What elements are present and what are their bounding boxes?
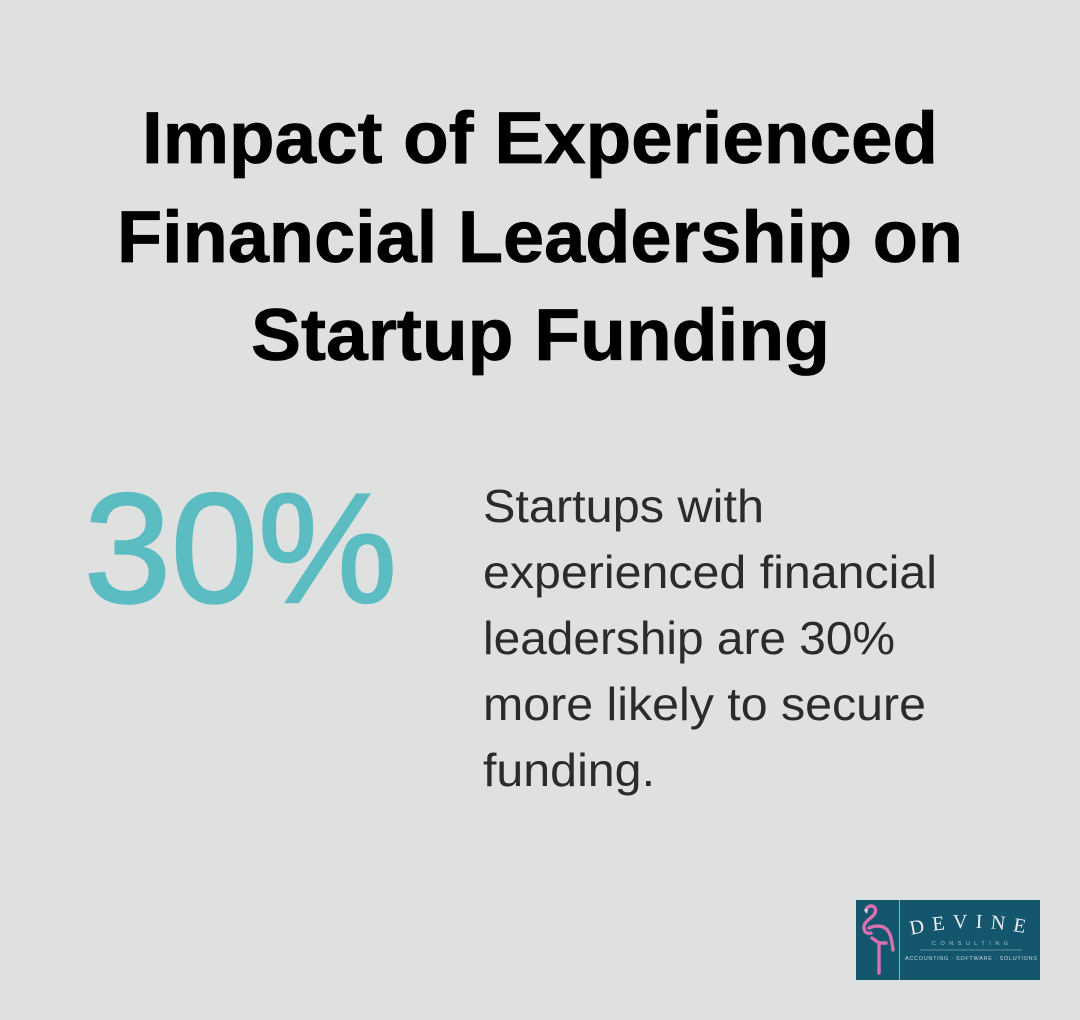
logo wordmark: DEVINE xyxy=(909,914,1026,935)
big stat: 30%: 30% xyxy=(84,462,397,636)
description text xyxy=(483,480,937,796)
title: Impact of Experienced xyxy=(142,98,938,179)
title: Financial Leadership on xyxy=(117,197,963,278)
description text: more likely to secure xyxy=(483,678,926,730)
logo: Devine Consulting xyxy=(856,900,1040,980)
title: Startup Funding xyxy=(251,295,830,376)
icon: flamingo beak xyxy=(864,909,868,914)
description text: funding. xyxy=(483,744,655,796)
icon: flamingo xyxy=(864,906,893,973)
title xyxy=(117,98,963,376)
description text: experienced financial xyxy=(483,546,937,598)
description text: leadership are 30% xyxy=(483,612,895,664)
logo tagline: ACCOUNTING · SOFTWARE · SOLUTIONS xyxy=(905,956,1037,962)
description text: Startups with xyxy=(483,480,764,532)
logo subtitle: CONSULTING xyxy=(932,941,1008,947)
